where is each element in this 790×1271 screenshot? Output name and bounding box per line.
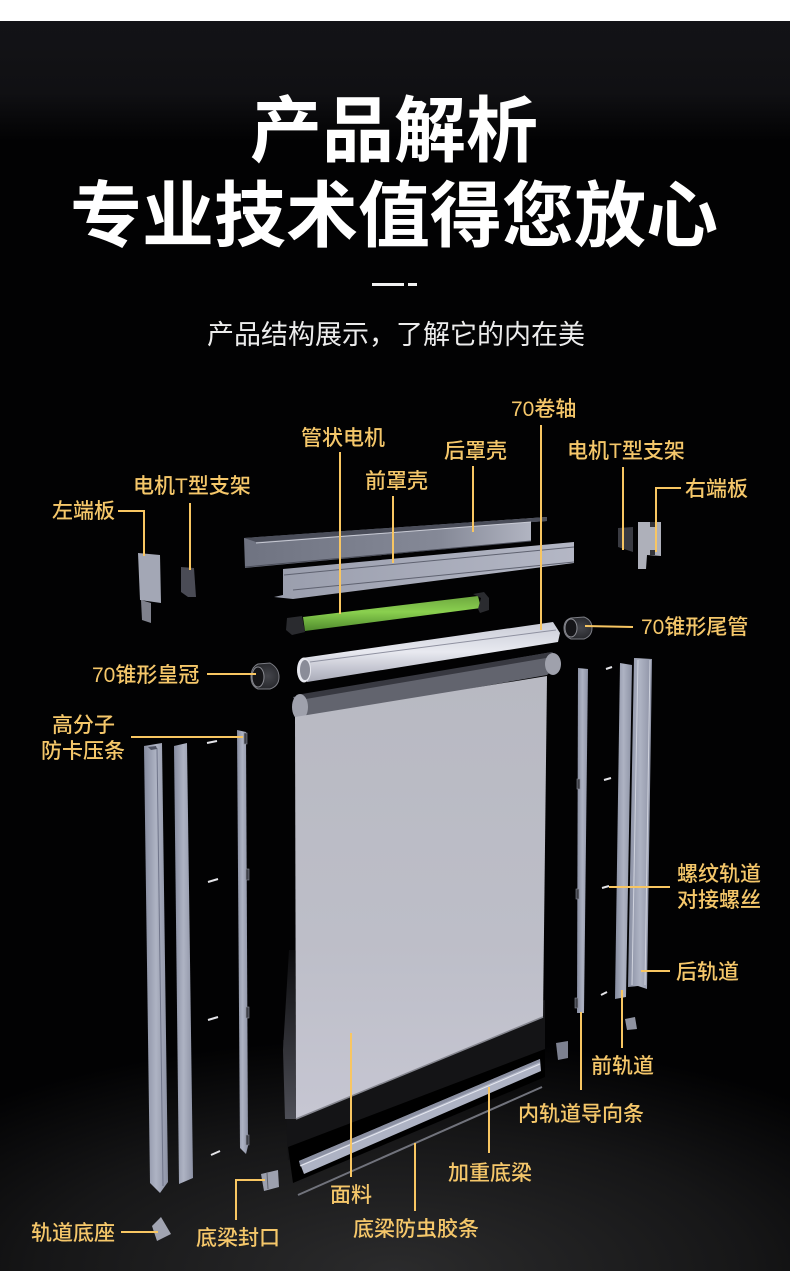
part labels: 内轨道导向条: [518, 1103, 644, 1126]
fabric panel: [283, 676, 547, 1119]
right end plate: [638, 522, 661, 569]
bottom rail end cap: [261, 1170, 279, 1191]
part labels: 70锥形皇冠: [92, 664, 199, 687]
right front rail: [615, 663, 632, 999]
left end plate: [138, 553, 161, 623]
part labels: 底梁封口: [196, 1227, 280, 1250]
right motor T bracket: [618, 527, 633, 552]
subtitle: 产品结构展示，了解它的内在美: [207, 320, 585, 350]
left screws: [207, 741, 220, 1155]
tubular motor: [286, 592, 489, 635]
track base: [152, 1217, 171, 1241]
part labels: 面料: [330, 1184, 372, 1207]
part labels: 后罩壳: [444, 440, 507, 463]
left inner rail: [237, 730, 249, 1154]
part labels: 左端板: [52, 500, 115, 523]
title: 产品解析: [250, 92, 538, 172]
left back rail: [144, 743, 168, 1193]
part labels: 高分子: [52, 714, 115, 737]
part labels: 防卡压条: [41, 740, 125, 763]
fabric roll: [292, 652, 561, 720]
exploded product diagram: [138, 517, 661, 1241]
part labels: 对接螺丝: [677, 889, 761, 912]
part labels: 底梁防虫胶条: [353, 1218, 479, 1241]
back cover shell: [244, 517, 547, 568]
guide clip: [556, 1041, 568, 1060]
right track base: [625, 1017, 637, 1030]
left motor T bracket: [181, 567, 196, 597]
bottom shadow band: [288, 1049, 545, 1183]
dark backing under fabric: [283, 1000, 545, 1160]
70 roller tube: [297, 622, 560, 682]
70 cone tail tube: [564, 617, 592, 639]
left front rail: [174, 743, 193, 1184]
part labels: [31, 398, 761, 1250]
part labels: 70卷轴: [511, 398, 576, 421]
part labels: 右端板: [685, 478, 748, 501]
part labels: 电机T型支架: [133, 475, 251, 498]
right back rail: [628, 658, 652, 989]
part labels: 前轨道: [591, 1055, 654, 1078]
part labels: 70锥形尾管: [641, 616, 748, 639]
insect seal strip: [298, 1087, 542, 1195]
part labels: 管状电机: [301, 427, 385, 450]
weighted bottom rail: [299, 1059, 541, 1174]
right inner rail: [575, 668, 588, 1013]
leader lines: [118, 425, 681, 1232]
part labels: 前罩壳: [365, 470, 428, 493]
part labels: 电机T型支架: [567, 440, 685, 463]
divider dash: [372, 283, 417, 286]
part labels: 轨道底座: [31, 1222, 115, 1245]
front cover shell: [274, 542, 574, 599]
part labels: 螺纹轨道: [677, 863, 761, 886]
part labels: 后轨道: [676, 961, 739, 984]
70 cone crown: [251, 663, 279, 689]
part labels: 加重底梁: [448, 1162, 532, 1185]
title: 专业技术值得您放心: [70, 177, 718, 257]
right screws: [601, 667, 612, 995]
title: [70, 92, 718, 257]
